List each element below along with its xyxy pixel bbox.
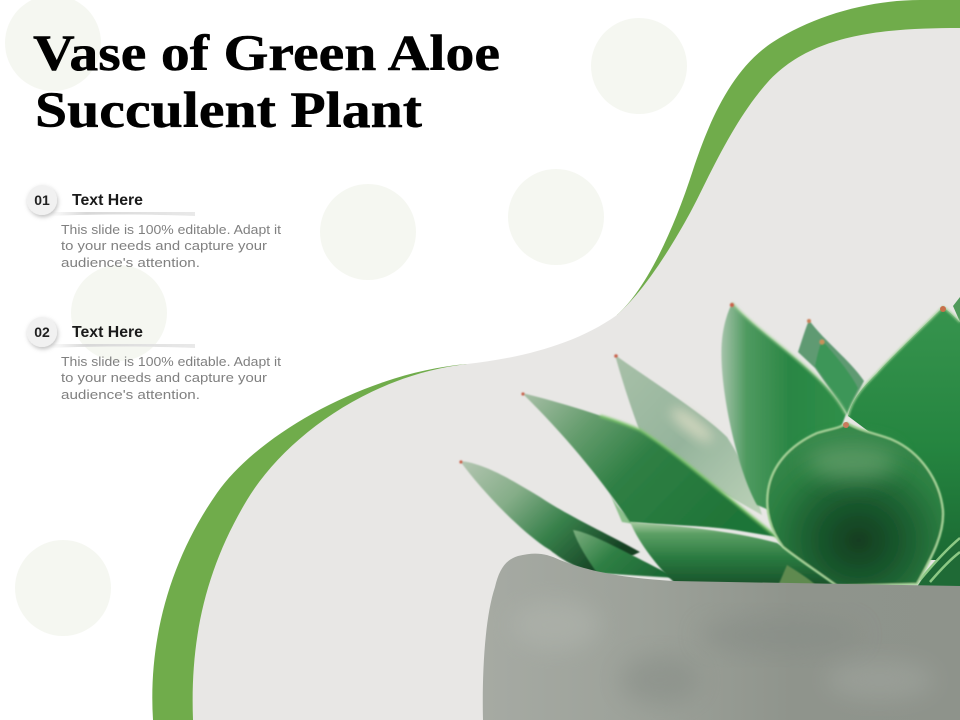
leaf: small front left [573, 530, 677, 578]
rule 02 [50, 344, 195, 348]
badge 02 [27, 317, 57, 347]
item 01 [27, 185, 281, 270]
leaf: pale frosted [607, 354, 762, 525]
badge 01 [27, 185, 57, 215]
body text 02: to your needs and capture your [61, 370, 268, 385]
body text 01: to your needs and capture your [61, 238, 268, 253]
leaf: tall centre left [721, 303, 846, 525]
leaf: far left [459, 460, 640, 572]
rule 01 [50, 212, 195, 216]
title [33, 26, 500, 139]
body text 02 [61, 354, 281, 402]
body text 01: This slide is 100% editable. Adapt it [61, 222, 281, 237]
body text 01: audience's attention. [61, 255, 200, 270]
leaf: small orange tipped [778, 564, 815, 584]
leaf: lower front [630, 522, 840, 587]
heading 01: Text Here [72, 192, 143, 209]
badge 01: 01 [34, 192, 50, 208]
body text 01 [61, 222, 281, 270]
leaf: big left [521, 392, 777, 537]
leaf: back pale cluster [798, 319, 864, 414]
title: Vase of Green Aloe [33, 26, 500, 82]
leaf: large right [848, 306, 960, 560]
leaf: central round [767, 422, 943, 586]
body text 02: audience's attention. [61, 387, 200, 402]
body text 02: This slide is 100% editable. Adapt it [61, 354, 281, 369]
badge 02: 02 [34, 324, 50, 340]
title: Succulent Plant [35, 83, 422, 139]
leaf: upper right corner [953, 297, 960, 322]
leaf: lower right [918, 537, 960, 586]
decorative pale circles [5, 0, 687, 636]
concrete pot [483, 554, 960, 720]
heading 02: Text Here [72, 324, 143, 341]
item 02 [27, 317, 281, 402]
